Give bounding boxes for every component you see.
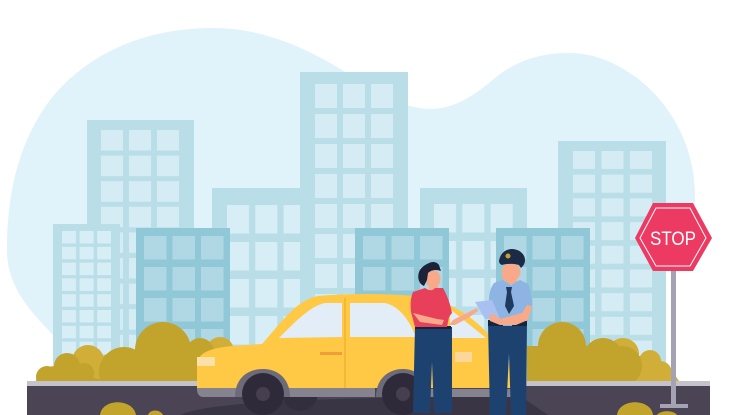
- building: small left: [53, 224, 120, 382]
- bushes: left: [36, 322, 234, 397]
- building: tall center: [300, 72, 408, 382]
- background blob: [7, 28, 695, 380]
- police officer: [475, 249, 532, 415]
- building: dark center: [355, 228, 449, 382]
- building: back left: [87, 120, 194, 382]
- building: back center right: [420, 188, 527, 382]
- car: [197, 294, 513, 415]
- building: dark left: [136, 228, 230, 382]
- building: dark right: [496, 228, 590, 382]
- bushes: right: [527, 322, 679, 386]
- roadside bushes foreground: [100, 402, 677, 415]
- building: back center left: [212, 188, 320, 382]
- stop sign: STOP: [650, 228, 696, 250]
- road: [27, 381, 710, 415]
- building: right: [558, 141, 666, 382]
- man in red shirt: [411, 262, 478, 413]
- stop sign: [635, 203, 712, 408]
